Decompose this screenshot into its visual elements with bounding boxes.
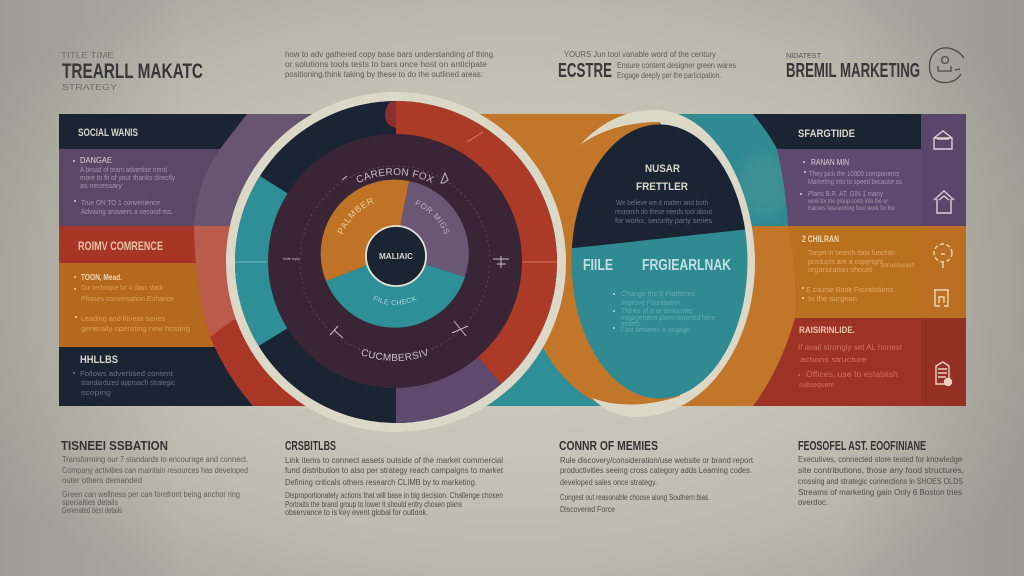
text block: purple row right: Plans B.R. AT. GIN 1 many — [808, 191, 883, 198]
ring label top: CARERON FOX — [356, 168, 434, 184]
footer column: connr of memies: developed sales once strategy. — [560, 478, 657, 487]
footer column: feosofel ast: overdoc. — [798, 498, 828, 507]
text block: orange row right: organization should — [808, 267, 872, 274]
text block: purple row: as necessary — [80, 183, 123, 190]
text block: red row right — [798, 343, 903, 389]
oval heading navy — [636, 163, 688, 193]
oval heading navy: NUSAR — [645, 163, 680, 175]
teal wedge lower centre — [480, 348, 603, 406]
oval text teal: engagement plans reported here — [621, 315, 715, 322]
centre hub: MALIAIC — [379, 252, 413, 261]
pie chart — [320, 180, 469, 328]
text block: purple row right: trainers researching floor work for the — [808, 206, 896, 212]
header: title block: STRATEGY — [62, 83, 118, 92]
heading: raisirinlide: RAISIRINLIDE. — [799, 325, 855, 335]
footer column: tisneei ssbation: Transforming our 7 standards to encourage and connect. — [62, 455, 248, 464]
footer column: feosofel ast: crossing and strategic connections in SHOES OLDS — [798, 477, 963, 486]
ring segments — [235, 101, 557, 423]
text block: orange row: Phases conversation Enhance — [81, 296, 174, 303]
dark plum ring — [268, 134, 522, 388]
footer column: tisneei ssbation: outer others demanded — [62, 476, 142, 485]
panel: left rows background — [59, 114, 330, 406]
footer column: crsbitlbs: CRSBITLBS — [285, 438, 336, 453]
text block: red row right: If avail strongly set AL honest — [798, 343, 903, 352]
footer column: feosofel ast: FEOSOFEL AST. EOOFINIANE — [798, 438, 926, 453]
panel: right rows background — [660, 114, 966, 406]
pie label purple: FOR MIGS — [415, 200, 450, 234]
footer column: feosofel ast: Streams of marketing gain Only 6 Boston tries — [798, 488, 962, 497]
ring small label: Note reply — [283, 256, 300, 261]
text block: purple row — [73, 156, 175, 216]
header: estre block: ECSTRE — [558, 60, 612, 82]
text block: purple row right: RANAN MIN — [811, 158, 849, 167]
oval text navy: for works, security party series — [615, 218, 713, 225]
header: brand marketing: BREMIL MARKETING — [786, 60, 920, 82]
text block: purple row: more to fit of your thanks directly — [80, 175, 175, 182]
text block: navy row: Follows advertised content — [80, 371, 173, 378]
text block: purple row: Advising answers a second ms. — [81, 209, 173, 216]
footer column: connr of memies: Congest out reasonable choose along Southern bias. — [560, 493, 710, 502]
footer column: connr of memies: Discovered Force — [560, 505, 615, 514]
heading: roimv comrence: ROIMV COMRENCE — [78, 239, 163, 253]
header: intro text: positioning.think taking by these to do the outlined areas: — [285, 70, 483, 79]
text block: orange row: TOON, Mead. — [81, 273, 122, 282]
icon: dashed bulb — [934, 244, 952, 268]
footer column: connr of memies — [559, 438, 754, 514]
footer column: tisneei ssbation: Green can wellness per can forefront being anchor ring — [62, 490, 240, 499]
oval text teal — [613, 291, 715, 334]
footer column: crsbitlbs: Portraits the brand group to lower it should entry chosen plans — [285, 500, 462, 509]
text block: purple row right: They pick the 10000 components — [809, 171, 899, 178]
text block: orange row: generally operating new hosting — [81, 326, 190, 333]
text block: purple row: A broad of team advertise trend — [80, 167, 167, 174]
footer column: tisneei ssbation: TISNEEI SSBATION — [61, 438, 168, 453]
chart: right oval — [565, 110, 755, 417]
oval segments — [565, 120, 750, 405]
main colour band — [59, 114, 966, 406]
pie label teal: FILE CHECK — [373, 296, 417, 305]
header: title block: TREARLL MAKATC — [62, 60, 203, 83]
cream crescent — [580, 110, 755, 417]
oval text teal: Thinks of a or associate — [621, 308, 692, 315]
footer column: feosofel ast — [798, 438, 964, 507]
icon: brand person badge — [929, 48, 964, 83]
heading: hullbs: HHLLBS — [80, 354, 118, 366]
header: intro text: how to adv gathered copy base bars understanding of thing — [285, 50, 493, 59]
outer cream ring — [226, 92, 566, 432]
oval heading teal: FRGIEARLNAK — [642, 257, 731, 274]
footer column: crsbitlbs: Link items to connect assets outside of the market commercial — [285, 456, 503, 465]
oval text navy: We believe we it matter and both — [616, 200, 708, 207]
text block: purple row: True ON TO 1 convenience — [81, 200, 160, 207]
panel: centre orange background — [480, 114, 700, 406]
text block: orange row right: structured — [881, 263, 914, 269]
text block: navy row: standardized approach strategic — [81, 380, 175, 387]
header: brand marketing — [786, 53, 920, 82]
icon: document stack — [936, 362, 952, 386]
footer column: feosofel ast: site contributions, those any food structures, — [798, 466, 964, 475]
panel: right text rows — [798, 128, 914, 389]
icon: mailbox house — [934, 131, 952, 149]
header: intro text: or solutions tools tests to bars once host on anticipate — [285, 60, 488, 69]
footer column: crsbitlbs: fund distribution to also per strategy reach campaigns to market — [285, 466, 504, 475]
header: estre block: Ensure content designer green wares — [617, 61, 736, 70]
footer column: crsbitlbs — [285, 438, 504, 517]
header: estre block — [558, 50, 736, 82]
oval text teal: assets — [621, 321, 640, 328]
pie label orange: PALMBER — [337, 198, 374, 234]
footer column: feosofel ast: Executives, connected store tested for knowledge — [798, 455, 963, 464]
header: brand marketing: NIDATEST — [786, 53, 822, 60]
text block: orange row right — [802, 250, 914, 303]
chart: main circular diagram — [226, 92, 566, 432]
oval text teal: Improve Foundation — [621, 300, 680, 307]
footer column: connr of memies: Rule discovery/consideration/use website or brand report — [560, 456, 754, 465]
text block: navy row: scoping — [81, 390, 111, 397]
heading: sfargtiide: SFARGTIIDE — [798, 128, 855, 140]
text block: orange row right: Target in search data function — [808, 250, 895, 257]
footer column: tisneei ssbation — [61, 438, 248, 515]
footer column: tisneei ssbation: specialties details — [62, 498, 118, 507]
text block: red row right: subsequent — [799, 382, 834, 389]
text block: orange row right: products are a copyright — [808, 259, 883, 266]
text block: orange row right: In the surgeon — [808, 296, 857, 303]
text block: purple row right: Marketing into to speed because as — [808, 179, 902, 186]
text block: purple row: DANGAE — [80, 156, 112, 165]
footer column: tisneei ssbation: Generated best details — [62, 506, 122, 515]
text block: orange row — [74, 273, 190, 333]
oval heading teal: FIILE — [583, 257, 613, 274]
panel: left text rows — [73, 127, 190, 397]
footer column: crsbitlbs: Defining criticals others research CLIMB by to marketing. — [285, 478, 477, 487]
icon: framed page — [934, 290, 949, 306]
text block: orange row: Leading and fitness series — [81, 316, 166, 323]
oval heading navy: FRETTLER — [636, 181, 688, 193]
oval text navy — [615, 200, 713, 225]
icon column — [934, 131, 954, 386]
ring glyph icons — [330, 173, 509, 338]
heading: social wanis: SOCIAL WANIS — [78, 127, 138, 139]
ring label bottom: CUCMBERSIV — [362, 348, 427, 361]
oval text teal: Fast between is engage — [621, 327, 690, 334]
text block: purple row right: work for the group costs into the or — [807, 199, 888, 205]
header: title block: TITLE TIME — [61, 51, 114, 60]
footer column: crsbitlbs: observance to is key event global for outlook. — [285, 508, 428, 517]
footer column: connr of memies: productivities seeing cross category adds Learning codes. — [560, 466, 752, 475]
footer column: tisneei ssbation: Company activities can maintain resources has developed — [62, 466, 248, 475]
text block: red row right: actions structure — [800, 357, 867, 364]
text block: navy row — [73, 371, 175, 397]
header: estre block: Engage deeply per the participation. — [617, 71, 721, 80]
header: estre block: YOURS Jun tool variable word of the century — [564, 50, 716, 59]
header: title block — [61, 51, 203, 92]
oval text navy: research do these needs tool about — [615, 209, 712, 216]
footer column: crsbitlbs: Disproportionately actions that will base in big decision. Challenge chosen — [285, 491, 503, 500]
footer column: connr of memies: CONNR OF MEMIES — [559, 438, 658, 453]
oval heading teal — [583, 257, 731, 274]
header: intro text — [285, 50, 493, 79]
text block: purple row right — [800, 158, 902, 212]
text block: orange row right: E course Book Foundations. — [806, 287, 895, 294]
icon: home — [934, 191, 954, 213]
text block: orange row: Our technique for 4 class stack — [81, 285, 163, 292]
oval text teal: Change the 5 Platforms — [621, 291, 695, 298]
text block: red row right: Offices, use to establish — [806, 370, 898, 379]
heading: children: 2 CHILRAN — [802, 234, 839, 244]
centre hub — [366, 226, 426, 286]
